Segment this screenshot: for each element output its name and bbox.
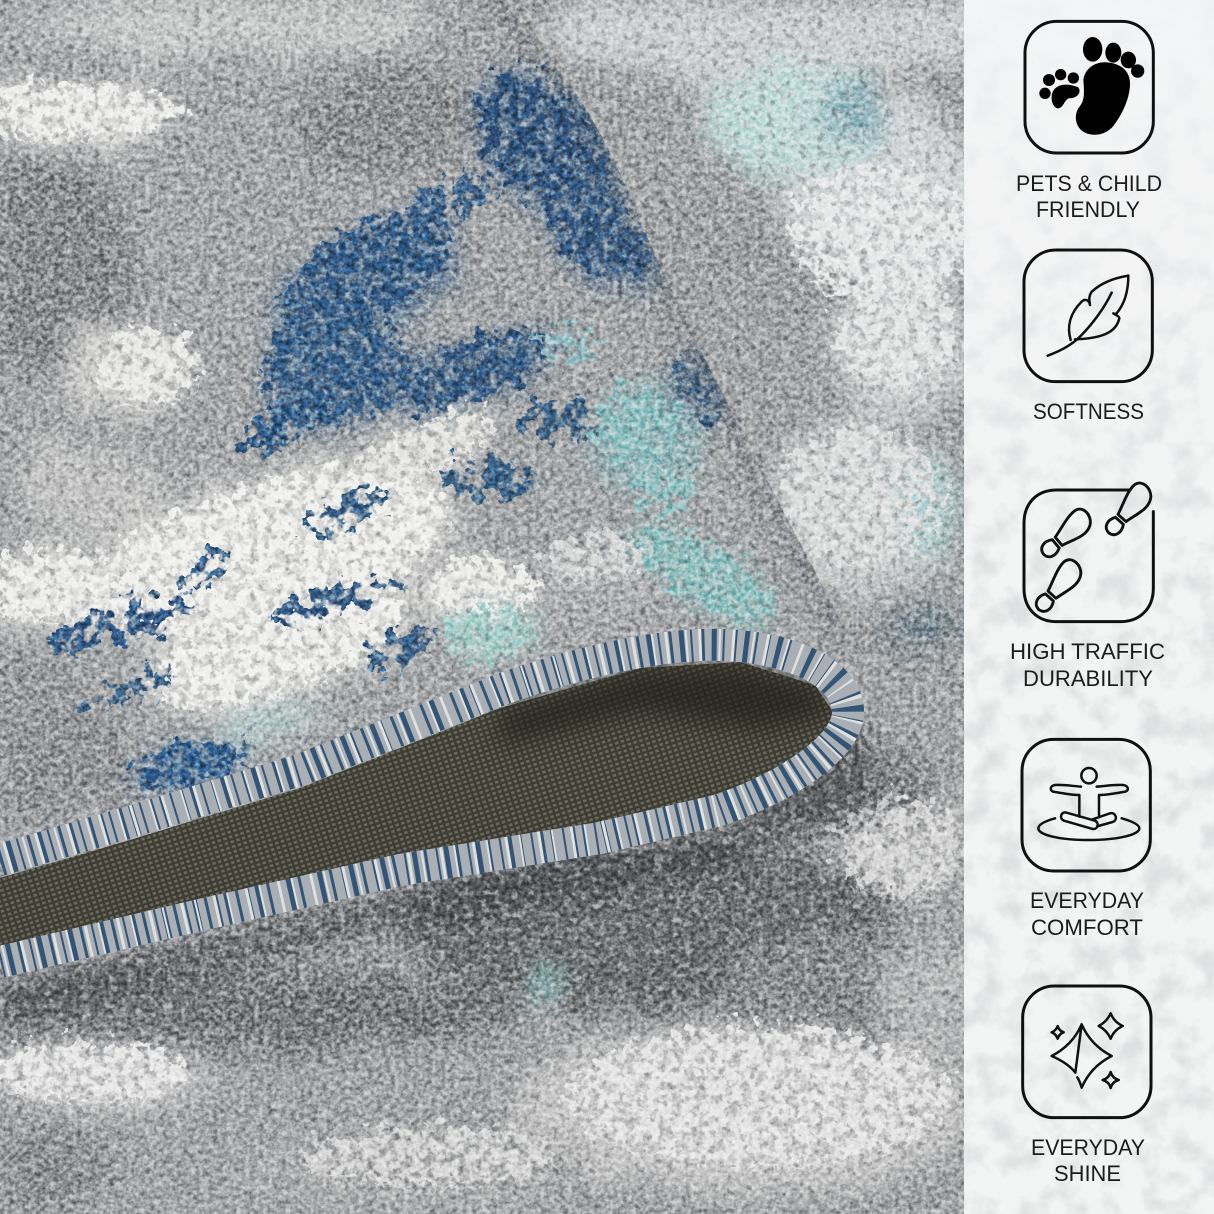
flap shadow [0, 720, 880, 1020]
rolled rug flap [0, 0, 900, 880]
side panel [964, 0, 1214, 1214]
label: COMFORT [1031, 915, 1143, 940]
label: DURABILITY [1023, 666, 1153, 691]
label: SHINE [1054, 1161, 1121, 1186]
feature: pets and child friendly [1016, 21, 1162, 222]
icon: paw and foot [1025, 21, 1153, 153]
icon: seated person [1022, 739, 1150, 871]
floor white flecks [0, 170, 970, 1190]
label: EVERYDAY [1030, 888, 1144, 913]
carpet speckle texture [0, 0, 964, 1214]
label: SOFTNESS [1033, 399, 1144, 424]
flap edge shading [490, 0, 850, 640]
rug edge binding [0, 645, 848, 962]
feature: everyday comfort [1022, 739, 1150, 940]
label: PETS & CHILD [1016, 171, 1162, 196]
feature: everyday shine [1023, 986, 1151, 1186]
icon: sparkles [1023, 986, 1151, 1118]
icon: feather [1024, 250, 1152, 382]
feature: softness [1024, 250, 1152, 424]
label: FRIENDLY [1036, 197, 1140, 222]
flap white flecks [0, 87, 640, 737]
underside backing [0, 662, 835, 950]
feature: high traffic durability [1010, 479, 1165, 691]
label: HIGH TRAFFIC [1010, 639, 1165, 664]
label: EVERYDAY [1031, 1135, 1145, 1160]
flap blue and teal flecks [43, 48, 790, 795]
icon: footprints [1024, 479, 1157, 622]
flap soft tones [0, 0, 784, 820]
